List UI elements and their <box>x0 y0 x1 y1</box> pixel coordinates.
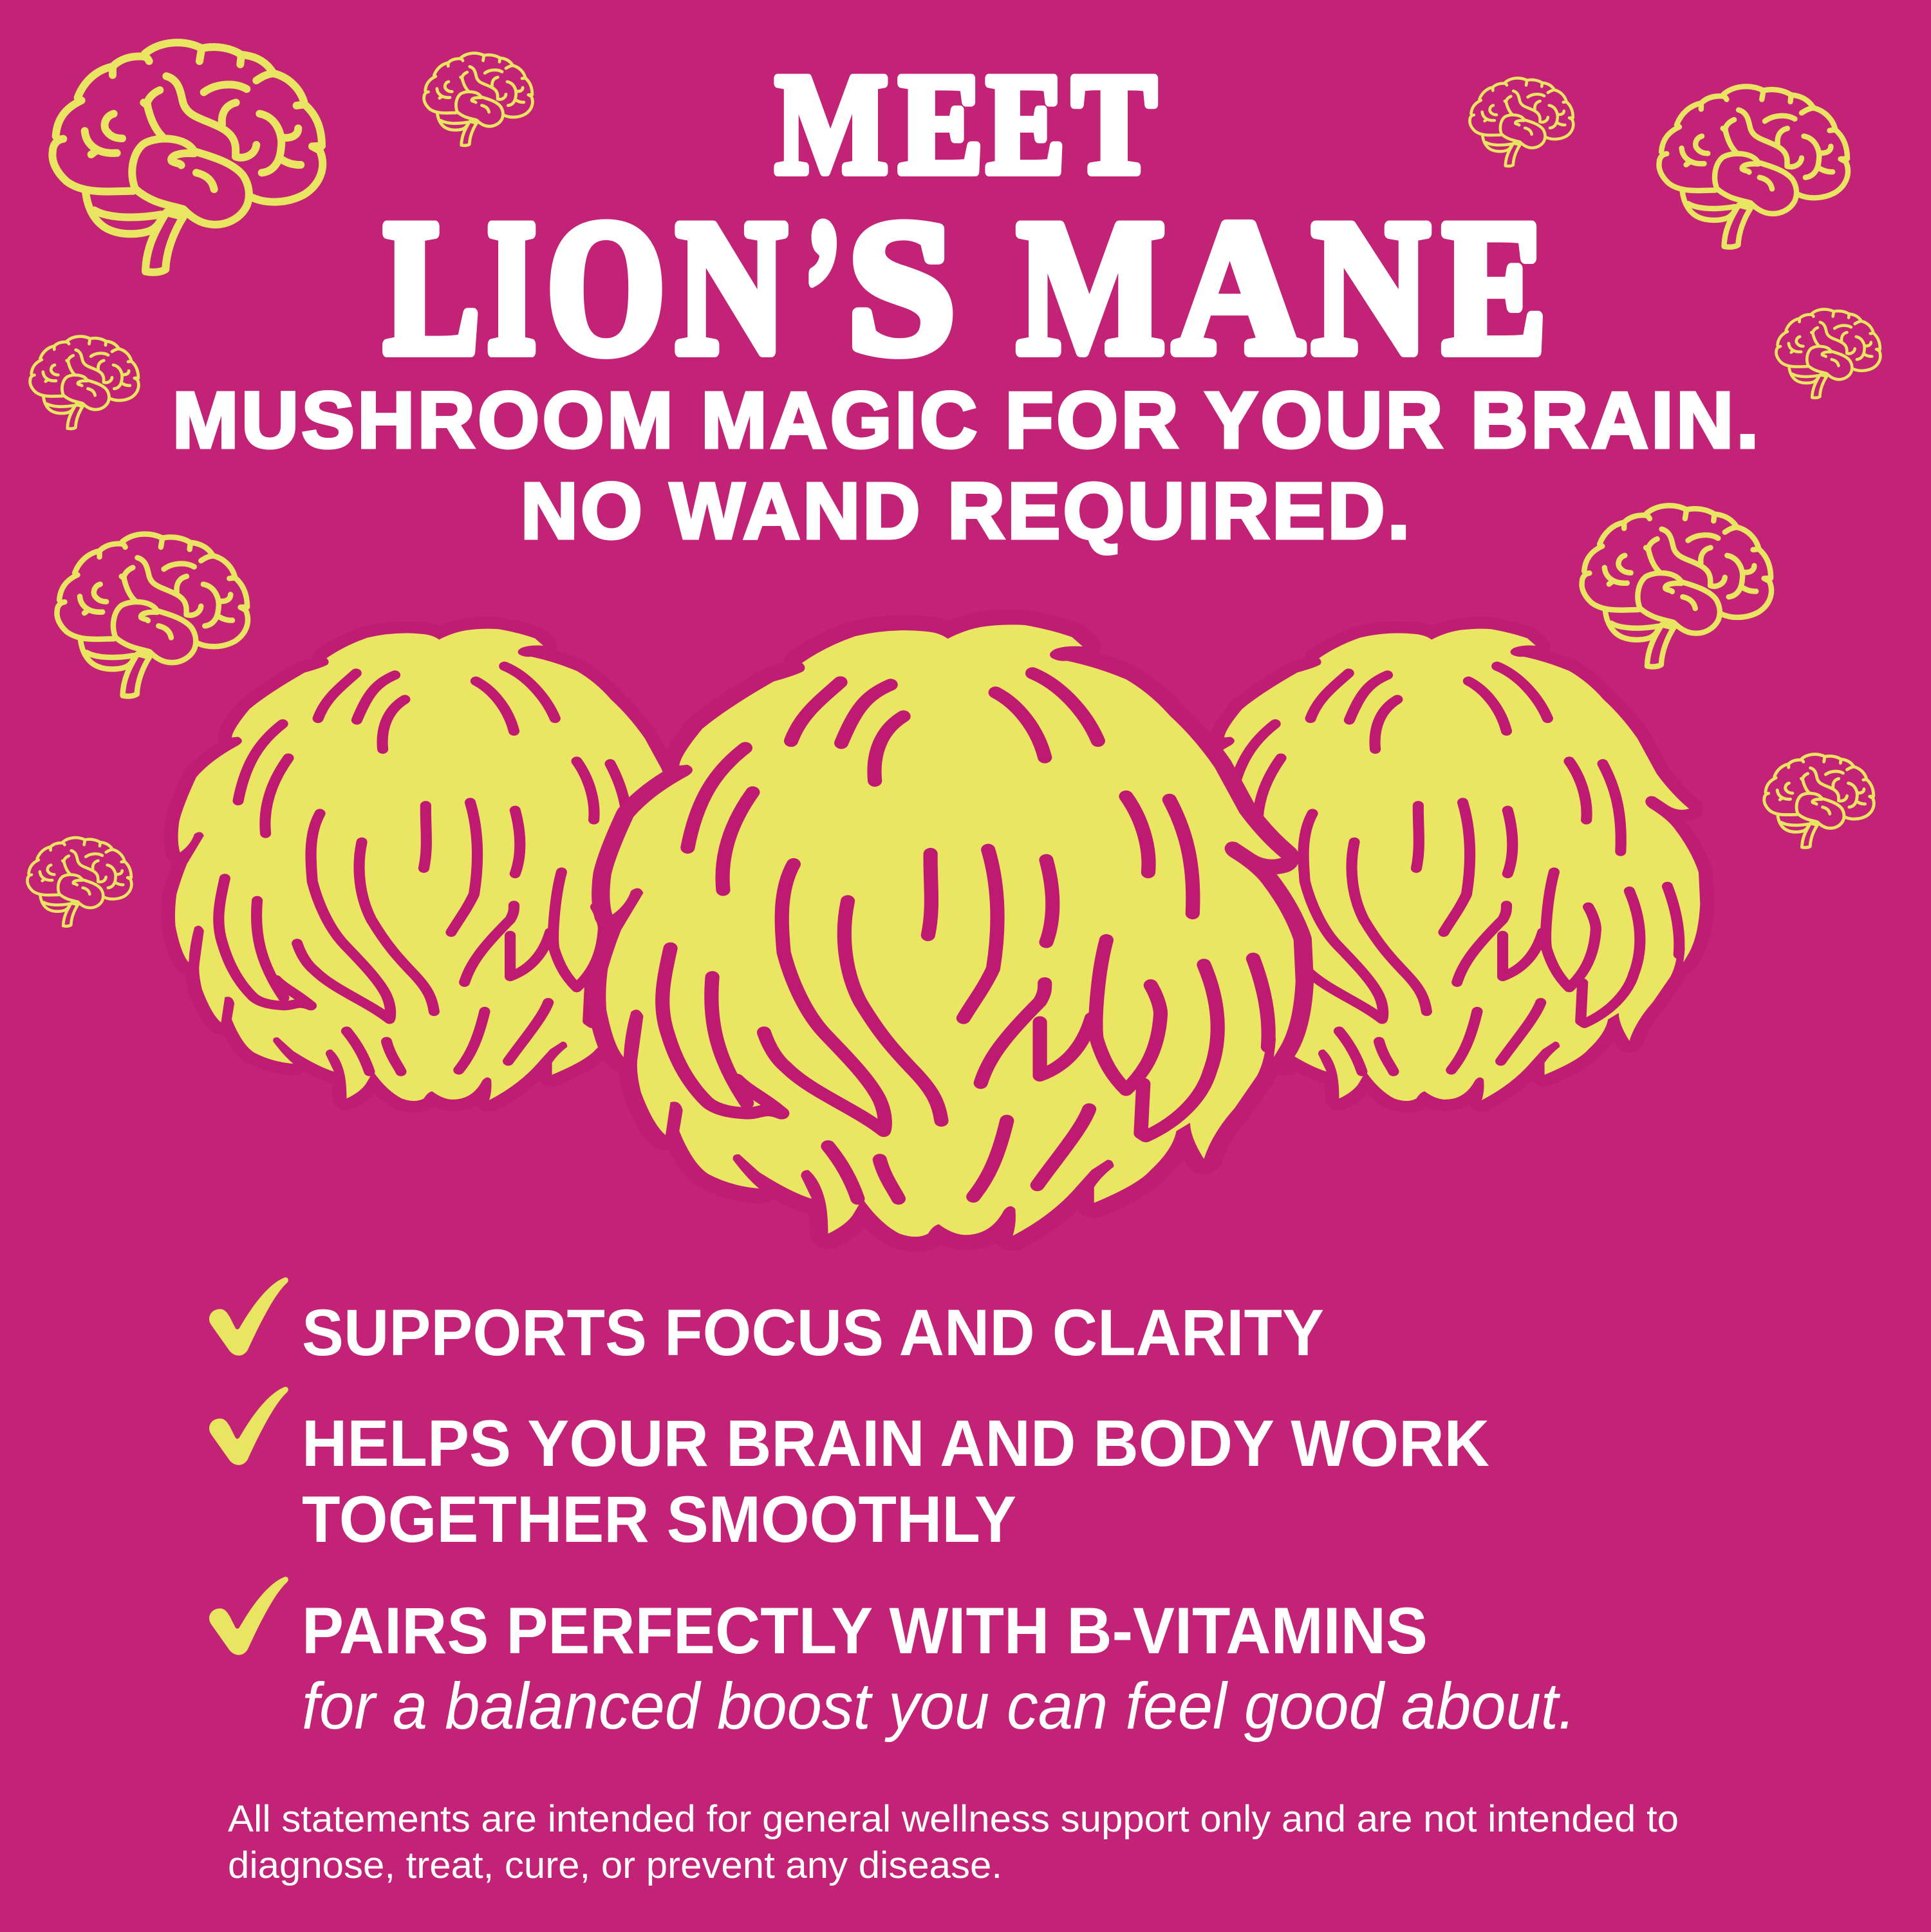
icon: small brain lower left <box>28 838 131 926</box>
heading: lion's mane: L <box>384 182 480 393</box>
icon: medium brain top right <box>1659 86 1848 247</box>
heading: meet: E <box>987 45 1065 203</box>
heading: lion's mane: O <box>547 182 665 393</box>
decorative brain icons <box>28 42 1880 926</box>
benefit 3 tagline: for a balanced boost you can feel good about. <box>302 1669 1576 1743</box>
disclaimer <box>228 1798 1679 1886</box>
heading: lion's mane: I <box>487 182 536 393</box>
heading: lion's mane: A <box>1174 182 1303 393</box>
icon: small brain lower right <box>1764 755 1874 848</box>
mushroom: center <box>606 624 1296 1237</box>
heading: meet: T <box>1072 45 1156 203</box>
benefit 1: SUPPORTS FOCUS AND CLARITY <box>302 1296 1324 1369</box>
benefit 3: PAIRS PERFECTLY WITH B-VITAMINS <box>302 1594 1428 1667</box>
heading: lion's mane: E <box>1443 182 1546 393</box>
icon: check 3 <box>209 1577 288 1655</box>
benefit 2 line 1: HELPS YOUR BRAIN AND BODY WORK <box>302 1407 1489 1480</box>
icon: small brain top right <box>1469 78 1573 166</box>
mushroom: left <box>175 629 707 1101</box>
subtitle line 2: NO WAND REQUIRED. <box>521 467 1410 556</box>
icon: small brain left <box>30 337 138 429</box>
icon: check 2 <box>209 1387 288 1465</box>
benefits list <box>209 1277 1576 1743</box>
heading: lion's mane: M <box>1018 182 1164 393</box>
lion's mane mushroom illustration <box>175 624 1700 1237</box>
heading: lion's mane: N <box>676 182 786 393</box>
disclaimer line 2: diagnose, treat, cure, or prevent any disease. <box>228 1844 1002 1886</box>
icon: small brain right <box>1777 309 1880 398</box>
icon: small brain top <box>424 53 532 145</box>
icon: large brain top left <box>52 42 322 272</box>
heading: lion's mane: N <box>1312 182 1429 393</box>
heading: meet: M <box>776 45 888 203</box>
disclaimer line 1: All statements are intended for general wellness support only and are not intended to <box>228 1798 1679 1840</box>
heading: meet: E <box>899 45 983 203</box>
benefit 2 line 2: TOGETHER SMOOTHLY <box>302 1483 1016 1556</box>
subtitle line 1: MUSHROOM MAGIC FOR YOUR BRAIN. <box>173 377 1758 465</box>
icon: medium brain left <box>57 534 248 696</box>
mushroom: right <box>1168 629 1700 1101</box>
icon: medium brain right <box>1582 505 1771 667</box>
heading: lion's mane: ’ <box>805 182 841 393</box>
icon: check 1 <box>209 1277 288 1356</box>
title block <box>173 45 1758 556</box>
heading: lion's mane: S <box>848 182 955 393</box>
